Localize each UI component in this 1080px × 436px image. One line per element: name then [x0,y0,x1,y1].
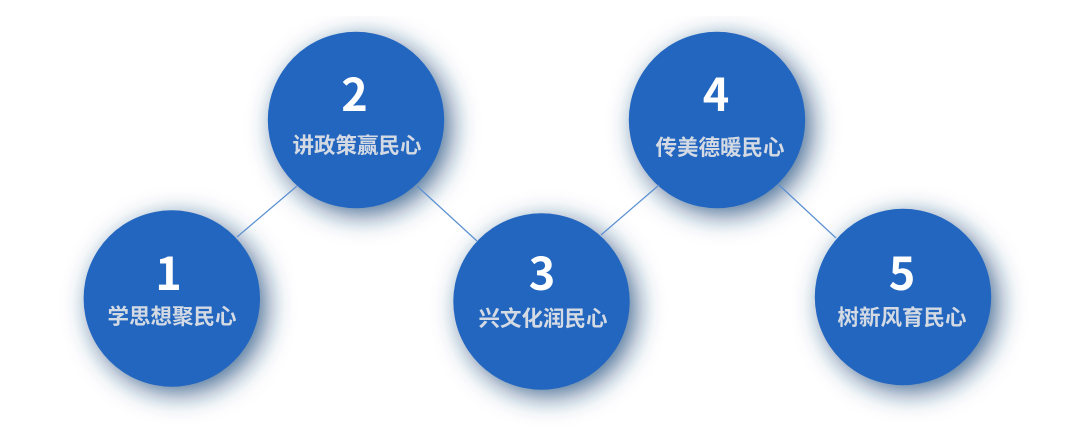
circle 3: 兴文化润民心: 兴文化润民心 [478,302,608,333]
circle 1: 学思想聚民心: 1 [155,238,182,303]
top white band clipping shadows [0,0,1080,16]
circle 4: 传美德暖民心: 传美德暖民心 [655,131,785,162]
circle 4: 传美德暖民心: 4 [703,59,729,124]
connector: circle 1 to circle 2 [237,186,297,237]
circle 5: 树新风育民心: 树新风育民心 [837,301,967,332]
connector: circle 4 to circle 5 [778,184,836,238]
circle 4: 传美德暖民心 [629,32,805,208]
circle 2: 讲政策赢民心: 讲政策赢民心 [292,129,422,160]
circle 3: 兴文化润民心 [453,213,630,390]
circle 2: 讲政策赢民心 [268,32,444,208]
connector: circle 3 to circle 4 [601,185,659,235]
circle 1: 学思想聚民心: 学思想聚民心 [107,300,237,331]
circle 3: 兴文化润民心: 3 [529,238,555,303]
circle 5: 树新风育民心: 5 [889,238,915,303]
connector: circle 2 to circle 3 [417,186,477,241]
circle 5: 树新风育民心 [815,209,991,385]
circle 2: 讲政策赢民心: 2 [341,59,368,124]
circle 1: 学思想聚民心 [84,210,260,387]
